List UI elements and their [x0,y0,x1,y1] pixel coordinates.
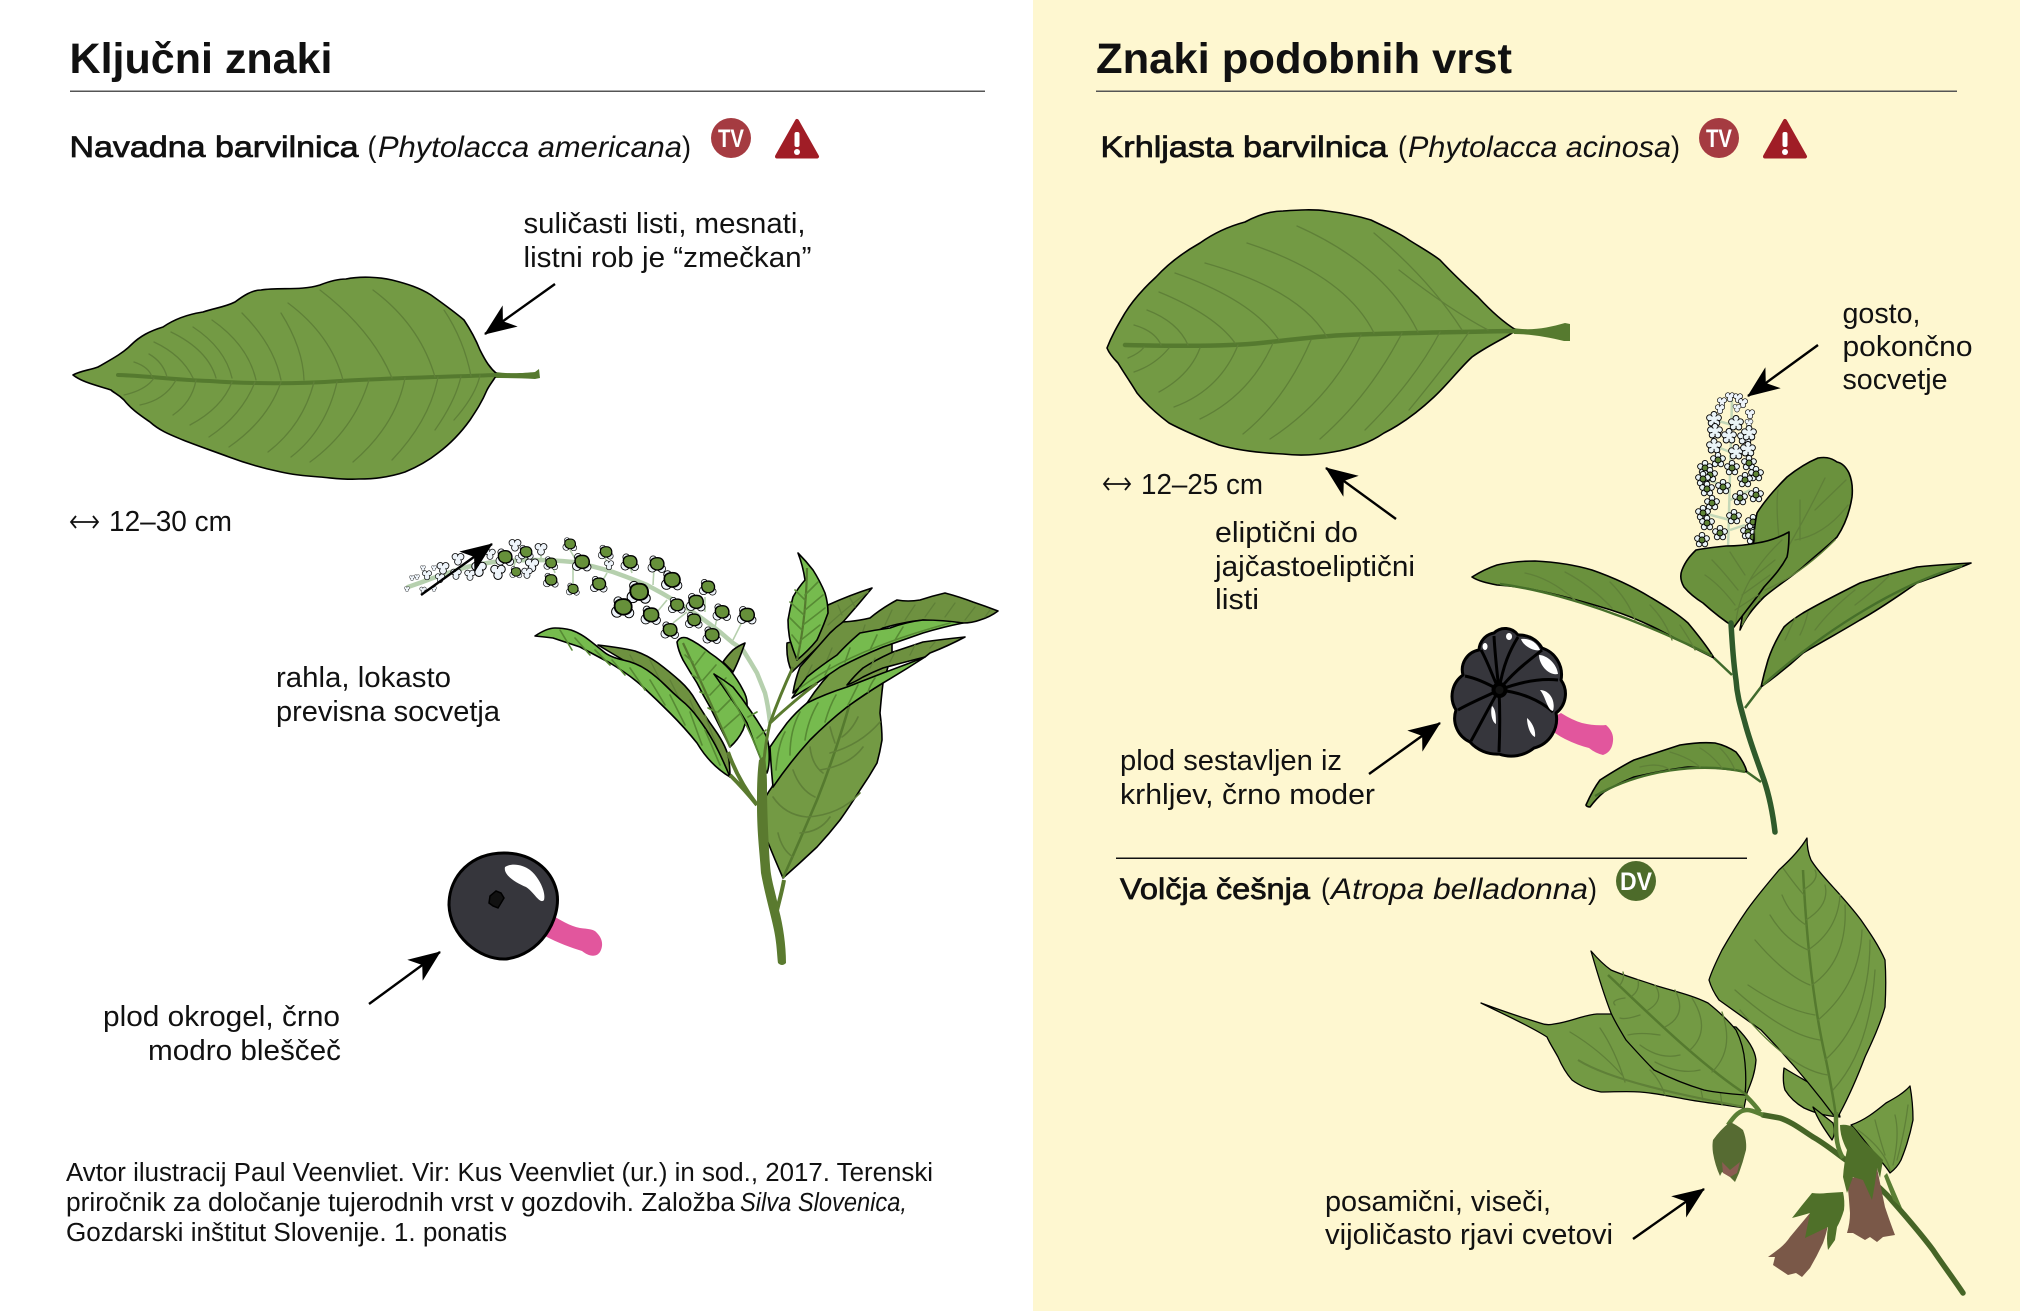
arrow: to inflorescence [1748,345,1818,396]
icon: warning triangle [777,121,817,156]
leaf: lower [1586,743,1747,807]
label: berry: modro bleščeč [148,1035,341,1067]
flower: hanging right [1847,1168,1895,1242]
species name: Atropa belladonna [1120,873,1597,906]
source note: priročnik za določanje tujerodnih vrst v gozdovih. Založba [66,1189,736,1217]
source note [66,1159,933,1247]
tall top leaf [788,553,828,660]
species name: Phytolacca acinosa: Krhljasta barvilnica [1100,131,1388,164]
leaf: right [1761,563,1971,687]
label: inflorescence [276,662,501,728]
species name: Phytolacca americana: Phytolacca americana [378,131,682,164]
label: flowers: vijoličasto rjavi cvetovi [1325,1219,1613,1251]
label: inflorescence [1842,298,1972,396]
icon: TV badge [1699,118,1739,158]
leaf: elliptic leaf [1107,210,1570,455]
species name: Atropa belladonna: Volčja češnja [1120,873,1310,906]
panel: key traits [66,35,998,1247]
stem [1731,623,1775,832]
species name: Phytolacca acinosa: Phytolacca acinosa [1408,131,1671,164]
label: elliptic leaf [1214,517,1415,616]
flower: bud [1712,1122,1746,1182]
species name: Phytolacca acinosa: ( [1398,131,1407,164]
species name: Phytolacca americana: ) [682,131,691,164]
source note: Silva Slovenica, [740,1189,907,1217]
arrow: to leaf [485,284,555,334]
heading rule [1096,90,1957,92]
label: leaf length: 12–25 cm [1141,469,1263,501]
label: inflorescence: rahla, lokasto [276,662,451,694]
label: inflorescence: socvetje [1842,364,1948,396]
leaf: middle [1591,951,1746,1095]
label: berry: plod okrogel, črno [103,1001,340,1033]
upper dark leaves [787,588,872,672]
source note: Gozdarski inštitut Slovenije. 1. ponatis [66,1219,507,1247]
leaf: lower small [1783,1068,1840,1117]
arrow: to inflorescence [421,544,492,595]
leaf: lanceolate leaf [73,277,540,479]
arrow: to flower [1633,1189,1704,1239]
arrow: to berry [369,952,440,1004]
label: inflorescence: gosto, [1842,298,1920,330]
label: leaf description: listni rob je “zmečkan” [524,242,812,274]
species name: Phytolacca acinosa: ) [1671,131,1680,164]
icon: DV badge: DV [1620,868,1652,896]
stems [1763,1115,1963,1293]
species name: Phytolacca americana [70,131,691,164]
label: inflorescence: previsna socvetja [276,696,501,728]
panel: similar species background [1033,0,2020,1311]
heading rule [70,90,985,92]
icon: DV badge [1616,861,1656,901]
leaf: front [1681,532,1789,627]
label: lobed fruit: plod sestavljen iz [1120,745,1342,777]
species name: Atropa belladonna: ( [1321,873,1330,906]
fruit scar [489,891,504,908]
flower stalks [513,550,742,640]
plant: Phytolacca acinosa branch [1472,393,1971,832]
heading: Znaki podobnih vrst: Znaki podobnih vrst [1096,35,1512,83]
label: flowers: posamični, viseči, [1325,1186,1551,1218]
label: berry [103,1001,341,1067]
label: elliptic leaf: listi [1215,584,1259,616]
left long leaves [598,645,730,777]
small white flowers [404,540,614,593]
label: elliptic leaf: eliptični do [1215,517,1358,549]
inflorescence [1695,393,1763,550]
large lower leaf [763,638,892,878]
arrow: to elliptic leaf [1326,468,1396,519]
fruit: round black berry [449,853,602,959]
heading: Ključni znaki: Ključni znaki [70,35,332,83]
label: leaf description [524,208,812,274]
stems [757,755,786,965]
plant: Phytolacca americana branch [404,538,998,965]
label: flowers [1325,1186,1613,1251]
fruit: lobed black fruit [1452,628,1613,756]
species name: Phytolacca americana: ( [368,131,376,164]
arrow: to lobed fruit [1369,723,1440,774]
species name: Phytolacca acinosa [1100,131,1680,164]
leaf: narrow bract [1813,1107,1834,1140]
leaf: upper right [1740,457,1852,630]
leaf: left [1472,561,1714,658]
leaf: large top [1709,838,1886,1117]
icon: TV badge [711,118,751,158]
plant: Atropa belladonna branch [1481,838,1963,1293]
inflorescence axis [408,560,770,722]
panel: similar species [1096,35,1972,1293]
light foreground leaf [770,657,925,787]
label: lobed fruit [1120,745,1375,811]
label: leaf length: 12–30 cm [109,506,232,538]
section rule [1116,858,1747,859]
icon: TV badge: TV [718,125,744,153]
leaf: back left [1481,1003,1756,1108]
label: lobed fruit: krhljev, črno moder [1120,779,1375,811]
source note: Avtor ilustracij Paul Veenvliet. Vir: Kus Veenvliet (ur.) in sod., 2017. Terenski [66,1159,933,1187]
label: inflorescence: pokončno [1842,331,1972,363]
label: elliptic leaf: jajčastoeliptični [1214,551,1415,583]
leaf: right small [1851,1086,1913,1173]
species name: Atropa belladonna: Atropa belladonna [1329,873,1588,906]
icon: warning triangle [1765,121,1805,156]
species name: Phytolacca americana: Navadna barvilnica [70,131,359,164]
flower stalk strip [1884,1173,1902,1208]
developing fruits [496,538,756,644]
icon: TV badge: TV [1706,125,1732,153]
species name: Atropa belladonna: ) [1588,873,1597,906]
flower: hanging left [1768,1213,1828,1277]
label: leaf description: suličasti listi, mesnati, [524,208,806,240]
